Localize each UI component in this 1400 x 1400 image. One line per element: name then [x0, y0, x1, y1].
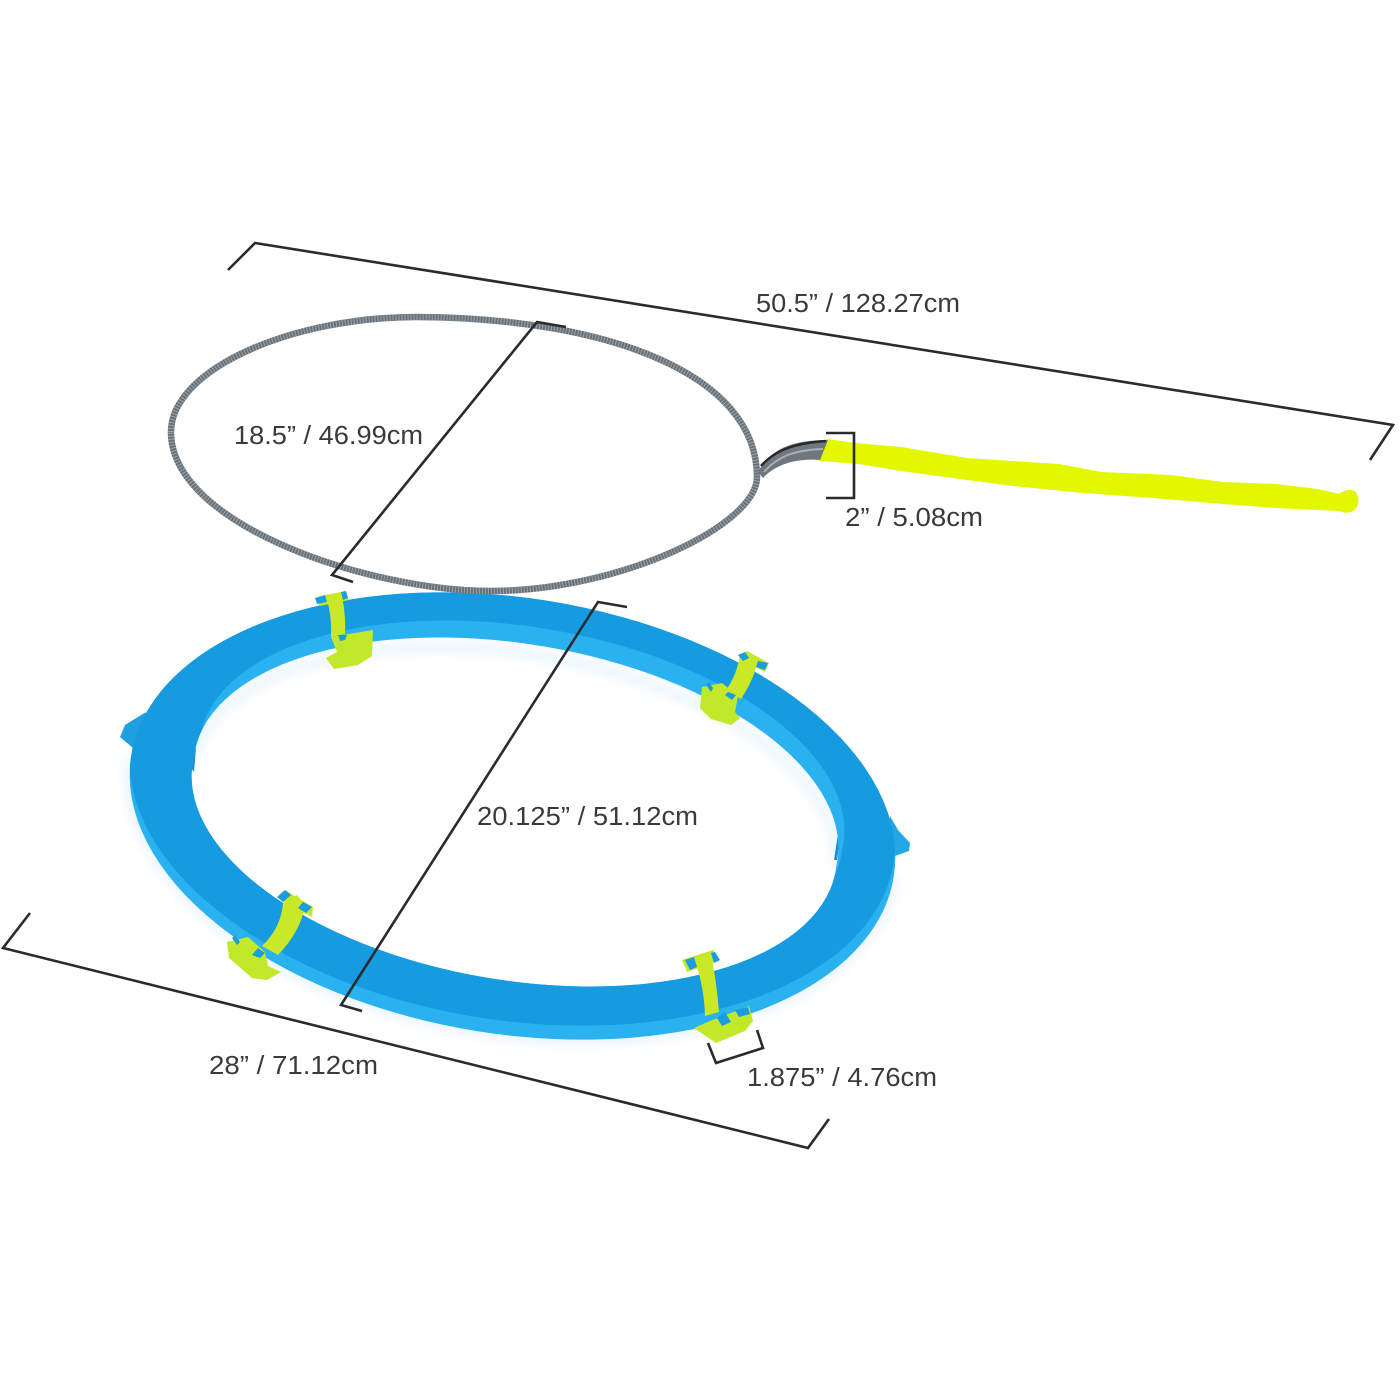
ring right inner nub — [834, 834, 840, 860]
label: hoop diameter: 18.5” / 46.99cm — [234, 422, 423, 450]
clip bottom right — [682, 950, 753, 1043]
wire neck strands — [758, 440, 828, 478]
label: clip width: 1.875” / 4.76cm — [747, 1064, 937, 1092]
ring darker channel — [130, 578, 895, 1026]
clip top left — [315, 591, 373, 669]
wire hoop — [171, 317, 757, 591]
label: wand length: 50.5” / 128.27cm — [756, 290, 960, 318]
dimension line: hoop diameter — [332, 322, 566, 582]
ring body — [130, 592, 895, 1040]
clip bottom left — [227, 890, 313, 980]
clip top right — [700, 651, 769, 725]
bubble wand — [171, 317, 1358, 591]
label: handle width: 2” / 5.08cm — [845, 504, 983, 532]
blue ring — [120, 578, 910, 1043]
dimension line: ring length — [3, 913, 829, 1148]
label: ring inner diameter: 20.125” / 51.12cm — [477, 803, 698, 831]
dimension line: clip width — [708, 1030, 763, 1063]
dimension line: handle width — [826, 433, 854, 498]
ring left tab — [120, 712, 146, 764]
product dimensions infographic — [0, 242, 1396, 1150]
ring soft shadow — [130, 647, 894, 1040]
dimension line: overall wand length — [228, 243, 1393, 460]
ring right tab — [889, 816, 910, 878]
dimension line: ring inner diameter — [341, 602, 627, 1011]
ring left inner nub — [191, 748, 196, 772]
yellow foam handle — [820, 440, 1358, 512]
label: ring length: 28” / 71.12cm — [209, 1052, 378, 1080]
